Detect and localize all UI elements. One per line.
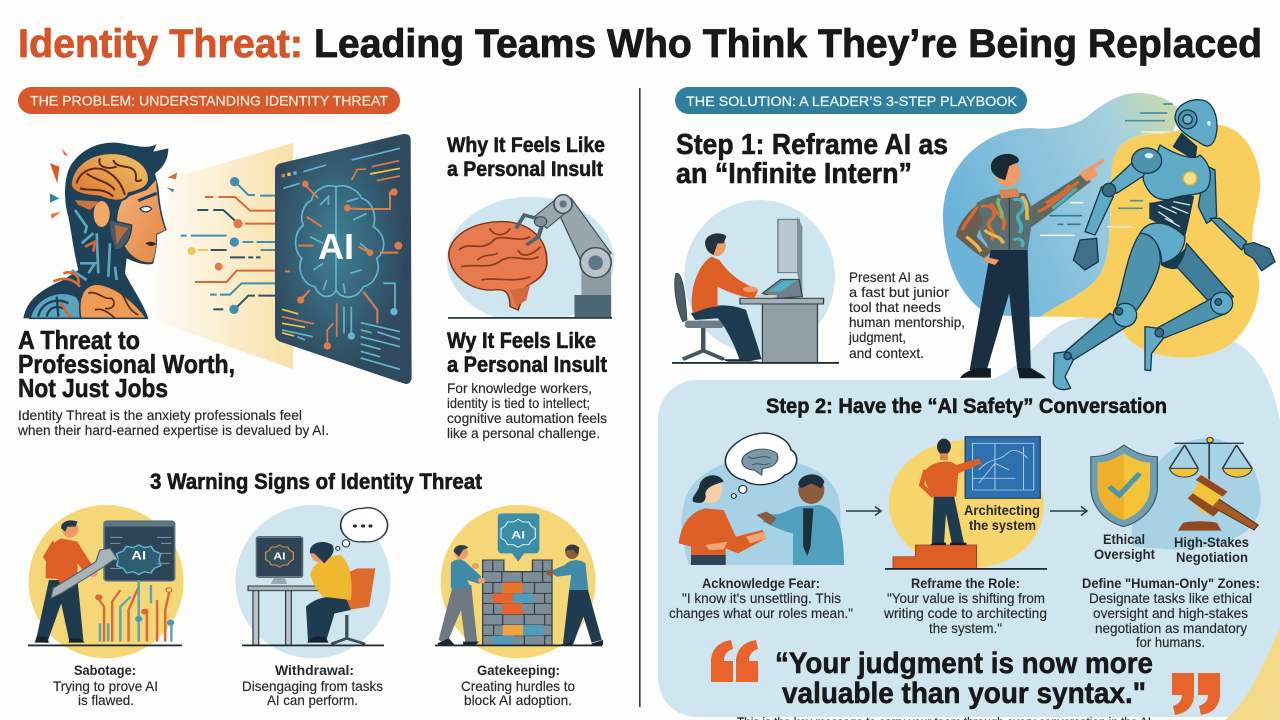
illustration: leader pointing at robot [956, 154, 1104, 378]
text: reframe the role: the system." [929, 620, 1002, 636]
label: gatekeeping: block AI adoption. [464, 692, 572, 708]
text: knowledge workers [447, 380, 607, 441]
circuit lines entering the screen [181, 177, 280, 314]
label: withdrawal: Withdrawal: [275, 662, 354, 678]
illustration: gatekeeping [437, 505, 603, 658]
text: reframe the role: "Your value is shifting from [887, 590, 1045, 606]
label: gatekeeping: Creating hurdles to [461, 678, 575, 694]
label: ethical oversight: Oversight [1094, 546, 1155, 562]
label: architecting the system [964, 502, 1040, 533]
light beam between head and screen [147, 143, 293, 369]
label: ethical oversight: Ethical [1103, 531, 1145, 547]
text: define human-only zones: Designate tasks like ethical [1089, 590, 1252, 606]
panel: the solution [658, 87, 1280, 720]
text: define human-only zones: negotiation as mandatory [1095, 620, 1247, 636]
illustration: reframe the role [889, 437, 1044, 568]
background shape: bottom right yellow corner [1225, 628, 1280, 720]
badge: the problem [18, 87, 400, 114]
text: present AI as a junior tool: a fast but junior [849, 284, 949, 300]
text: present AI as a junior tool: tool that needs [849, 299, 941, 315]
step 1 heading: an “Infinite Intern” [676, 158, 912, 190]
step 2 heading: Step 2: Have the “AI Safety” Conversation [766, 394, 1167, 418]
badge: the problem: THE PROBLEM: UNDERSTANDING IDENTITY THREAT [30, 92, 388, 108]
heading: wy it feels like a personal insult [447, 328, 608, 377]
heading: why it feels like a personal insult: a Personal Insult [447, 158, 603, 181]
text: define human-only zones: oversight and high-stakes [1093, 605, 1248, 621]
background shape: yellow blob [1040, 124, 1260, 358]
quote: valuable than your syntax." [782, 677, 1146, 710]
label: withdrawal [242, 662, 383, 708]
text: knowledge workers: like a personal challenge. [447, 425, 600, 441]
step 1 heading [676, 129, 948, 190]
label: withdrawal: AI can perform. [267, 692, 358, 708]
illustration: infinite intern at desk [675, 200, 835, 363]
label: architecting the system: Architecting [964, 502, 1040, 518]
icon: closing quotation mark [1172, 673, 1220, 715]
text: present AI as a junior tool [848, 269, 965, 361]
background shape: blue blob [943, 93, 1180, 317]
label: high-stakes negotiation: High-Stakes [1174, 534, 1249, 550]
center divider [639, 88, 641, 707]
text: acknowledge fear: "I know it's unsettling. This [682, 590, 841, 606]
label: withdrawal: Disengaging from tasks [242, 678, 383, 694]
label: sabotage [53, 662, 158, 708]
illustration: gatekeeping: AI [511, 528, 525, 541]
text: knowledge workers: For knowledge workers, [447, 380, 592, 396]
illustration: sabotage [29, 505, 184, 658]
label: high-stakes negotiation: Negotiation [1176, 549, 1248, 565]
text: acknowledge fear: changes what our roles mean." [669, 605, 853, 621]
label: ethical oversight [1094, 531, 1155, 562]
text: present AI as a junior tool: and context. [849, 345, 924, 361]
text: present AI as a junior tool: Present AI as [849, 269, 929, 285]
label: high-stakes negotiation [1174, 534, 1249, 565]
text: define human-only zones: Define "Human-Only" Zones: [1082, 575, 1260, 591]
text: present AI as a junior tool: human mentorship, [849, 314, 965, 330]
illustration: conversation between two people [679, 433, 844, 565]
text: define human-only zones [1082, 575, 1260, 650]
label: gatekeeping [461, 662, 575, 708]
text: identity threat definition: when their hard-earned expertise is devalued by AI. [17, 422, 329, 438]
text: identity threat definition: Identity Threat is the anxiety professionals feel [18, 407, 302, 423]
illustration: shield, scales, gavel [1091, 437, 1261, 549]
text: define human-only zones: for humans. [1136, 634, 1205, 650]
heading: why it feels like a personal insult [447, 134, 605, 181]
illustration: robot arm gripping a brain [447, 195, 614, 323]
badge: the solution [675, 87, 1027, 114]
illustration: AI screen with brain: AI [318, 226, 354, 267]
illustration: withdrawal [235, 505, 390, 658]
title: Leading Teams Who Think They’re Being Replaced [314, 22, 1262, 66]
text: knowledge workers: cognitive automation feels [447, 410, 607, 426]
label: gatekeeping: Gatekeeping: [477, 662, 560, 678]
quote [775, 647, 1153, 710]
illustration: sabotage: AI [131, 549, 146, 562]
text: reframe the role [883, 575, 1047, 636]
icon: opening quotation mark [711, 640, 758, 682]
heading: why it feels like a personal insult: Why It Feels Like [447, 134, 605, 157]
panel: the problem [17, 87, 614, 708]
label: sabotage: Trying to prove AI [53, 678, 158, 694]
text: reframe the role: Reframe the Role: [911, 575, 1020, 591]
text: acknowledge fear: Acknowledge Fear: [702, 575, 820, 591]
illustration: withdrawal: AI [273, 551, 286, 562]
label: sabotage: is flawed. [78, 692, 134, 708]
badge: the solution: THE SOLUTION: A LEADER’S 3-STEP PLAYBOOK [686, 93, 1018, 109]
heading: a threat to professional worth: A Threat to [18, 325, 140, 355]
arrow: step flow two [1050, 506, 1087, 516]
heading: a threat to professional worth: Professional Worth, [18, 349, 235, 379]
text: reframe the role: writing code to architecting [883, 605, 1047, 621]
quote: “Your judgment is now more [775, 647, 1153, 680]
label: sabotage: Sabotage: [74, 662, 136, 678]
step 1 heading: Step 1: Reframe AI as [676, 129, 948, 161]
illustration: running robot [1040, 100, 1275, 390]
label: architecting the system: the system [969, 517, 1036, 533]
heading: a threat to professional worth: Not Just Jobs [18, 373, 168, 403]
heading: wy it feels like a personal insult: Wy It Feels Like [447, 328, 596, 353]
illustration: head with exposed brain [23, 143, 177, 318]
heading: a threat to professional worth [18, 325, 235, 403]
arrow: step flow one [846, 506, 881, 516]
text: knowledge workers: identity is tied to intellect; [447, 395, 590, 411]
text: identity threat definition [17, 407, 329, 438]
title: Identity Threat: [18, 22, 303, 66]
text: present AI as a junior tool: judgment, [848, 329, 906, 345]
illustration: AI screen with brain [275, 134, 412, 384]
heading: 3 warning signs: 3 Warning Signs of Identity Threat [150, 469, 483, 494]
background shape: step 2 panel [658, 315, 1280, 717]
heading: wy it feels like a personal insult: a Personal Insult [447, 352, 608, 377]
text: acknowledge fear [669, 575, 853, 621]
